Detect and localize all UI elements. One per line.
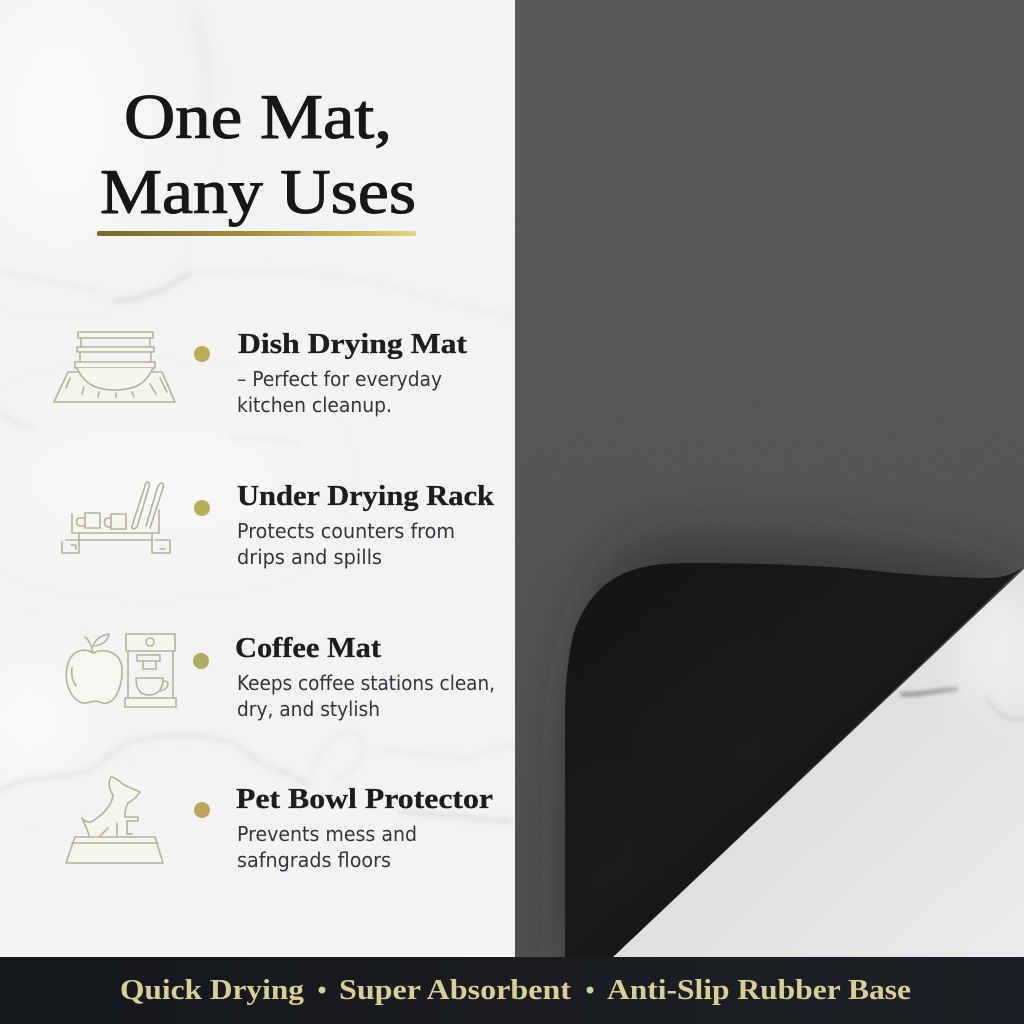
item: pet bowl protector (66, 777, 493, 872)
description: under drying rack (237, 519, 455, 569)
description: dish drying mat: – Perfect for everyday (237, 367, 442, 391)
heading: pet bowl protector: Pet Bowl Protector (236, 784, 493, 815)
separator dot (586, 986, 594, 994)
description: coffee mat: Keeps coffee stations clean, (237, 671, 495, 695)
item: coffee mat (66, 633, 495, 721)
description: coffee mat (237, 671, 495, 721)
description: coffee mat: dry, and stylish (237, 697, 380, 721)
description: pet bowl protector: Prevents mess and (237, 822, 417, 846)
description: dish drying mat (237, 367, 442, 417)
bullet dot (194, 346, 210, 362)
bullet dot (194, 500, 210, 516)
feature: anti-slip rubber base: Anti-Slip Rubber Base (607, 974, 911, 1006)
icon: dog on pet bowl (66, 777, 163, 863)
separator dot (318, 986, 326, 994)
description: under drying rack: drips and spills (237, 545, 382, 569)
description: dish drying mat: kitchen cleanup. (237, 393, 392, 417)
panel: gray mat with folded corner (515, 0, 1024, 960)
heading: under drying rack: Under Drying Rack (237, 481, 494, 512)
feature: quick drying: Quick Drying (120, 974, 305, 1006)
title: One Mat, (124, 82, 392, 152)
feature: super absorbent: Super Absorbent (339, 974, 571, 1006)
item: under drying rack (62, 481, 494, 569)
description: under drying rack: Protects counters from (237, 519, 455, 543)
title: Many Uses (100, 157, 416, 227)
title (100, 82, 416, 227)
heading: coffee mat: Coffee Mat (235, 633, 382, 664)
gray mat surface (515, 0, 1024, 957)
gold underline (97, 231, 416, 236)
item: dish drying mat (54, 329, 468, 417)
bottom band (0, 957, 1024, 1024)
description: pet bowl protector: safngrads floors (237, 848, 391, 872)
bullet dot (194, 802, 210, 818)
heading: dish drying mat: Dish Drying Mat (238, 329, 468, 360)
panel: marble background (2, 270, 511, 824)
description: pet bowl protector (237, 822, 417, 872)
icon: apple and coffee machine (66, 634, 176, 707)
exposed marble corner (600, 560, 1024, 957)
icon: drying rack with cups and plates (62, 482, 170, 553)
icon: stacked bowls on mat (54, 332, 175, 402)
bullet dot (193, 653, 209, 669)
black underside flap (560, 560, 1024, 960)
